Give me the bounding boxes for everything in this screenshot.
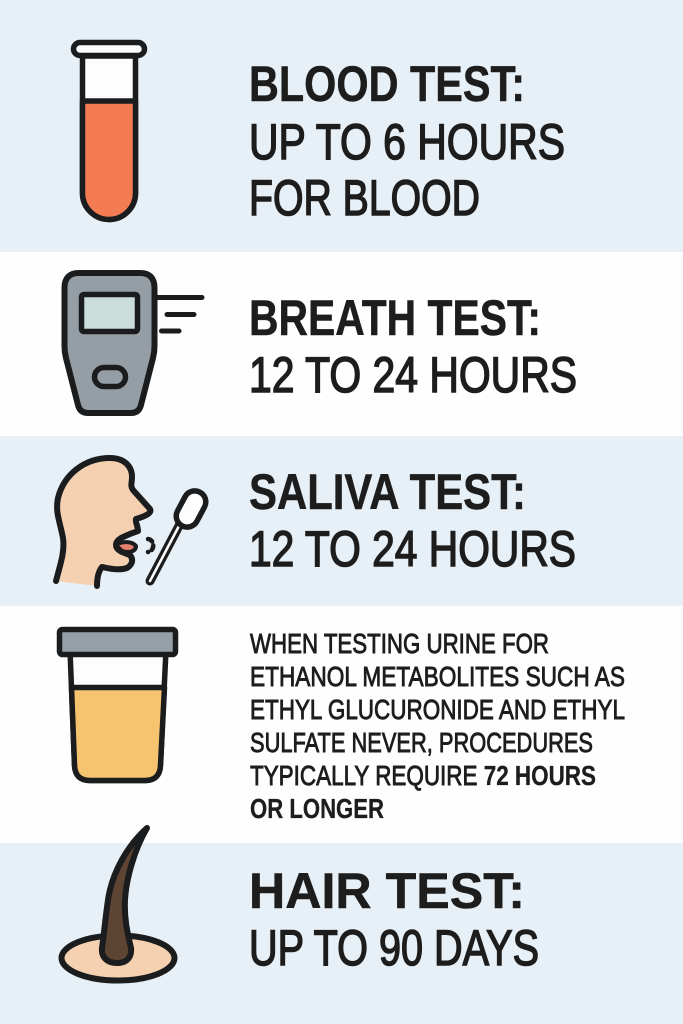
panel: breath test — [0, 252, 683, 436]
text: saliva test window: 12 TO 24 HOURS — [249, 521, 576, 577]
heading: blood test: BLOOD TEST: — [249, 56, 525, 112]
icon: hair follicle — [62, 828, 174, 980]
text: urine test description: TYPICALLY REQUIRE 72 HOURS — [250, 760, 596, 791]
text: hair test window: UP TO 90 DAYS — [249, 920, 539, 976]
icon: swab — [150, 487, 210, 581]
heading: saliva test: SALIVA TEST: — [249, 464, 526, 520]
icon: specimen cup — [60, 630, 176, 780]
heading: hair test: HAIR TEST: — [249, 863, 525, 919]
panel: saliva test — [0, 436, 683, 606]
text: blood test window: UP TO 6 HOURS — [249, 114, 565, 170]
text: urine test description — [250, 628, 625, 824]
text: blood test window — [249, 114, 565, 226]
icon: head with open mouth — [56, 458, 153, 586]
panel: hair test — [0, 828, 683, 1024]
text: urine test description: SULFATE NEVER, PROCEDURES — [250, 727, 593, 758]
icon: test tube — [74, 42, 144, 220]
icon: breathalyzer — [64, 273, 202, 413]
panel: blood test — [0, 0, 683, 252]
text: blood test window: FOR BLOOD — [249, 170, 480, 226]
text: urine test description: OR LONGER — [250, 793, 384, 824]
heading: breath test: BREATH TEST: — [249, 290, 541, 346]
text: urine test description: WHEN TESTING URINE FOR — [250, 628, 549, 659]
text: breath test window: 12 TO 24 HOURS — [249, 347, 577, 403]
panel: urine test — [0, 606, 683, 843]
